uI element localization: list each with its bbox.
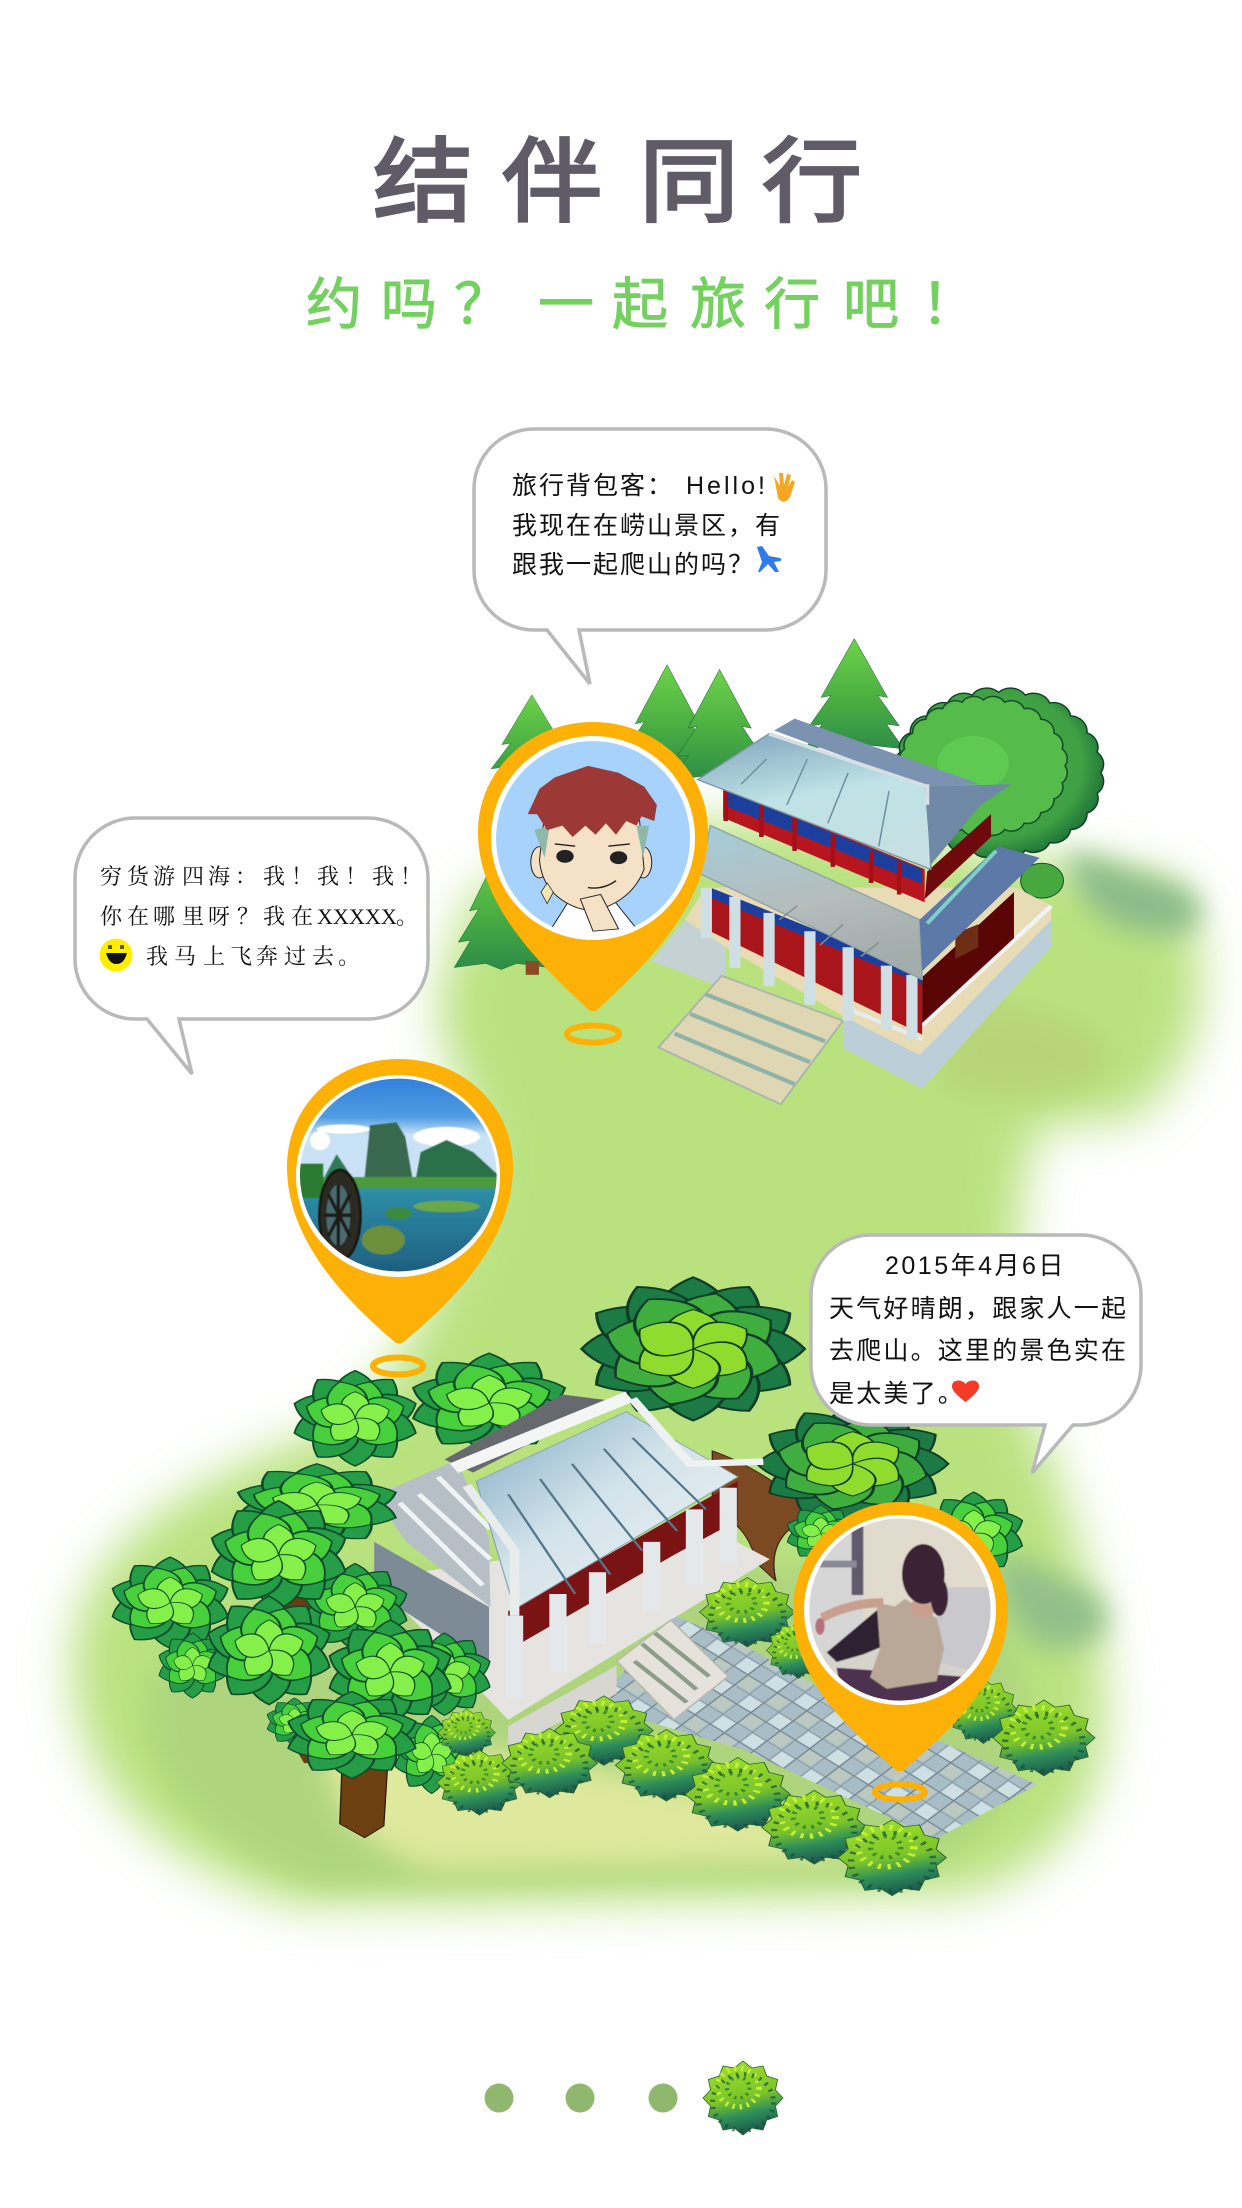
map pin: backpacker avatar <box>478 722 708 1042</box>
map pin: landscape photo <box>287 1059 513 1374</box>
left tree group <box>106 1464 495 1838</box>
backpacker message <box>512 472 782 579</box>
illustration: lower temple scene <box>106 1276 1095 1896</box>
avatar: cartoon boy <box>496 741 690 936</box>
temple lower storey <box>700 826 1039 1039</box>
round tree <box>894 688 1104 898</box>
traveller message: 我马上飞奔过去。 <box>146 944 360 969</box>
icon: smiley <box>100 938 132 972</box>
back trees <box>288 1276 1028 1581</box>
diary message: 去爬山。这里的景色实在 <box>829 1337 1128 1365</box>
traveller message <box>100 864 422 969</box>
diary message: 天气好晴朗，跟家人一起 <box>829 1295 1128 1323</box>
icon: waving hand <box>774 473 795 502</box>
pine trees <box>454 639 904 975</box>
traveller message: 穷货游四海：我！我！我！ <box>100 864 422 889</box>
photo: karst river landscape <box>297 1076 500 1273</box>
temple base and stairs <box>652 888 1051 1104</box>
traveller message: 你在哪里呀？我在XXXXX。 <box>100 904 418 929</box>
stone paving <box>604 1616 1038 1839</box>
background: green terrain <box>73 822 1201 1905</box>
pin ground ring <box>373 1358 423 1374</box>
icon: airplane <box>757 546 782 572</box>
pin ground ring <box>567 1026 619 1042</box>
diary message: 2015年4月6日 <box>885 1252 1066 1280</box>
backpacker message: 我现在在崂山景区，有 <box>512 512 782 540</box>
pagination indicator <box>484 2061 783 2135</box>
icon: heart <box>952 1380 979 1402</box>
speech bubble: backpacker <box>474 429 826 684</box>
backpacker message: 旅行背包客： <box>512 472 674 500</box>
backpacker message: 跟我一起爬山的吗？ <box>512 551 755 579</box>
backpacker message: Hello! <box>686 472 768 500</box>
speech bubble: family trip diary <box>811 1235 1141 1473</box>
diary message <box>829 1252 1128 1408</box>
speech bubble: budget traveller <box>75 818 428 1074</box>
hedge bushes <box>436 1577 1095 1896</box>
photo: girl by window <box>809 1518 991 1701</box>
temple upper storey <box>698 719 1011 902</box>
illustration: upper temple scene <box>454 639 1104 1104</box>
pin ground ring <box>875 1784 925 1800</box>
title: 结伴同行 <box>373 108 862 241</box>
subtitle: 约吗？一起旅行吧！ <box>306 260 977 341</box>
map pin: girl photo <box>793 1502 1008 1800</box>
temple <box>374 1394 770 1748</box>
diary message: 是太美了。 <box>829 1380 965 1408</box>
icon: active bush marker <box>703 2061 783 2135</box>
